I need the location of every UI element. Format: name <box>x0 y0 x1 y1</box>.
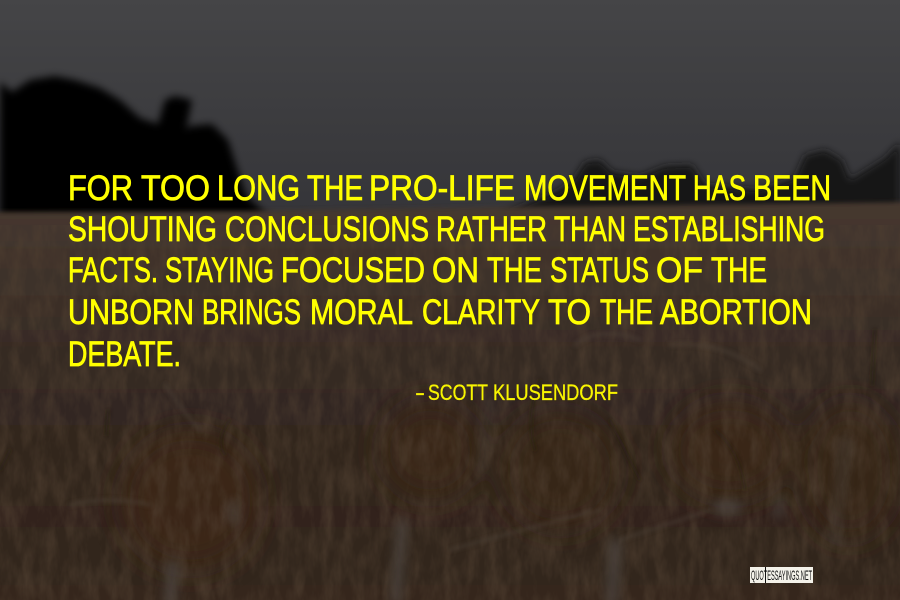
author attribution: - <box>415 380 425 405</box>
wheat ears dark <box>0 330 875 490</box>
background: wheat field <box>0 202 900 600</box>
line 3: OF <box>656 251 703 290</box>
line 1: BEEN <box>753 169 831 208</box>
line 4: TO <box>548 293 591 332</box>
line 2: RATHER <box>436 210 547 249</box>
author attribution: SCOTT <box>428 380 488 405</box>
line 2: SHOUTING <box>68 210 217 249</box>
line 4: MORAL <box>310 293 413 332</box>
line 4: THE <box>600 293 653 332</box>
line 3: FOCUSED <box>281 251 425 290</box>
background: sky <box>0 0 900 215</box>
background: distant trees on the right <box>500 142 900 215</box>
line 3: STAYING <box>165 251 274 290</box>
line 4: ABORTION <box>660 293 812 332</box>
line 2 <box>68 210 825 249</box>
author attribution <box>415 380 618 405</box>
line 5: DEBATE. <box>68 335 181 374</box>
quote poster: QUOTESSAYINGS.NET <box>751 567 812 583</box>
line 3: FACTS. <box>68 251 158 290</box>
line 4 <box>68 293 812 332</box>
line 3: THE <box>487 251 542 290</box>
wheat ears light <box>70 334 760 550</box>
line 3 <box>68 251 767 290</box>
line 1: TOO <box>141 169 210 208</box>
line 1 <box>68 169 831 208</box>
line 1: FOR <box>68 169 133 208</box>
line 1: LONG <box>217 169 300 208</box>
line 2: THAN <box>554 210 626 249</box>
watermark badge <box>750 567 813 583</box>
line 1: HAS <box>693 169 746 208</box>
line 2: ESTABLISHING <box>633 210 825 249</box>
line 4: BRINGS <box>202 293 301 332</box>
line 4: CLARITY <box>422 293 540 332</box>
line 4: UNBORN <box>68 293 194 332</box>
line 3: THE <box>711 251 767 290</box>
line 3: STATUS <box>550 251 649 290</box>
author attribution: KLUSENDORF <box>493 380 618 405</box>
line 1: PRO-LIFE <box>369 169 515 208</box>
background: dark tree cluster on the left <box>0 76 270 222</box>
blurred pale stalks <box>170 400 845 600</box>
quote text <box>68 169 831 374</box>
line 1: THE <box>307 169 363 208</box>
line 3: ON <box>432 251 479 290</box>
line 1: MOVEMENT <box>524 169 686 208</box>
line 2: CONCLUSIONS <box>225 210 429 249</box>
